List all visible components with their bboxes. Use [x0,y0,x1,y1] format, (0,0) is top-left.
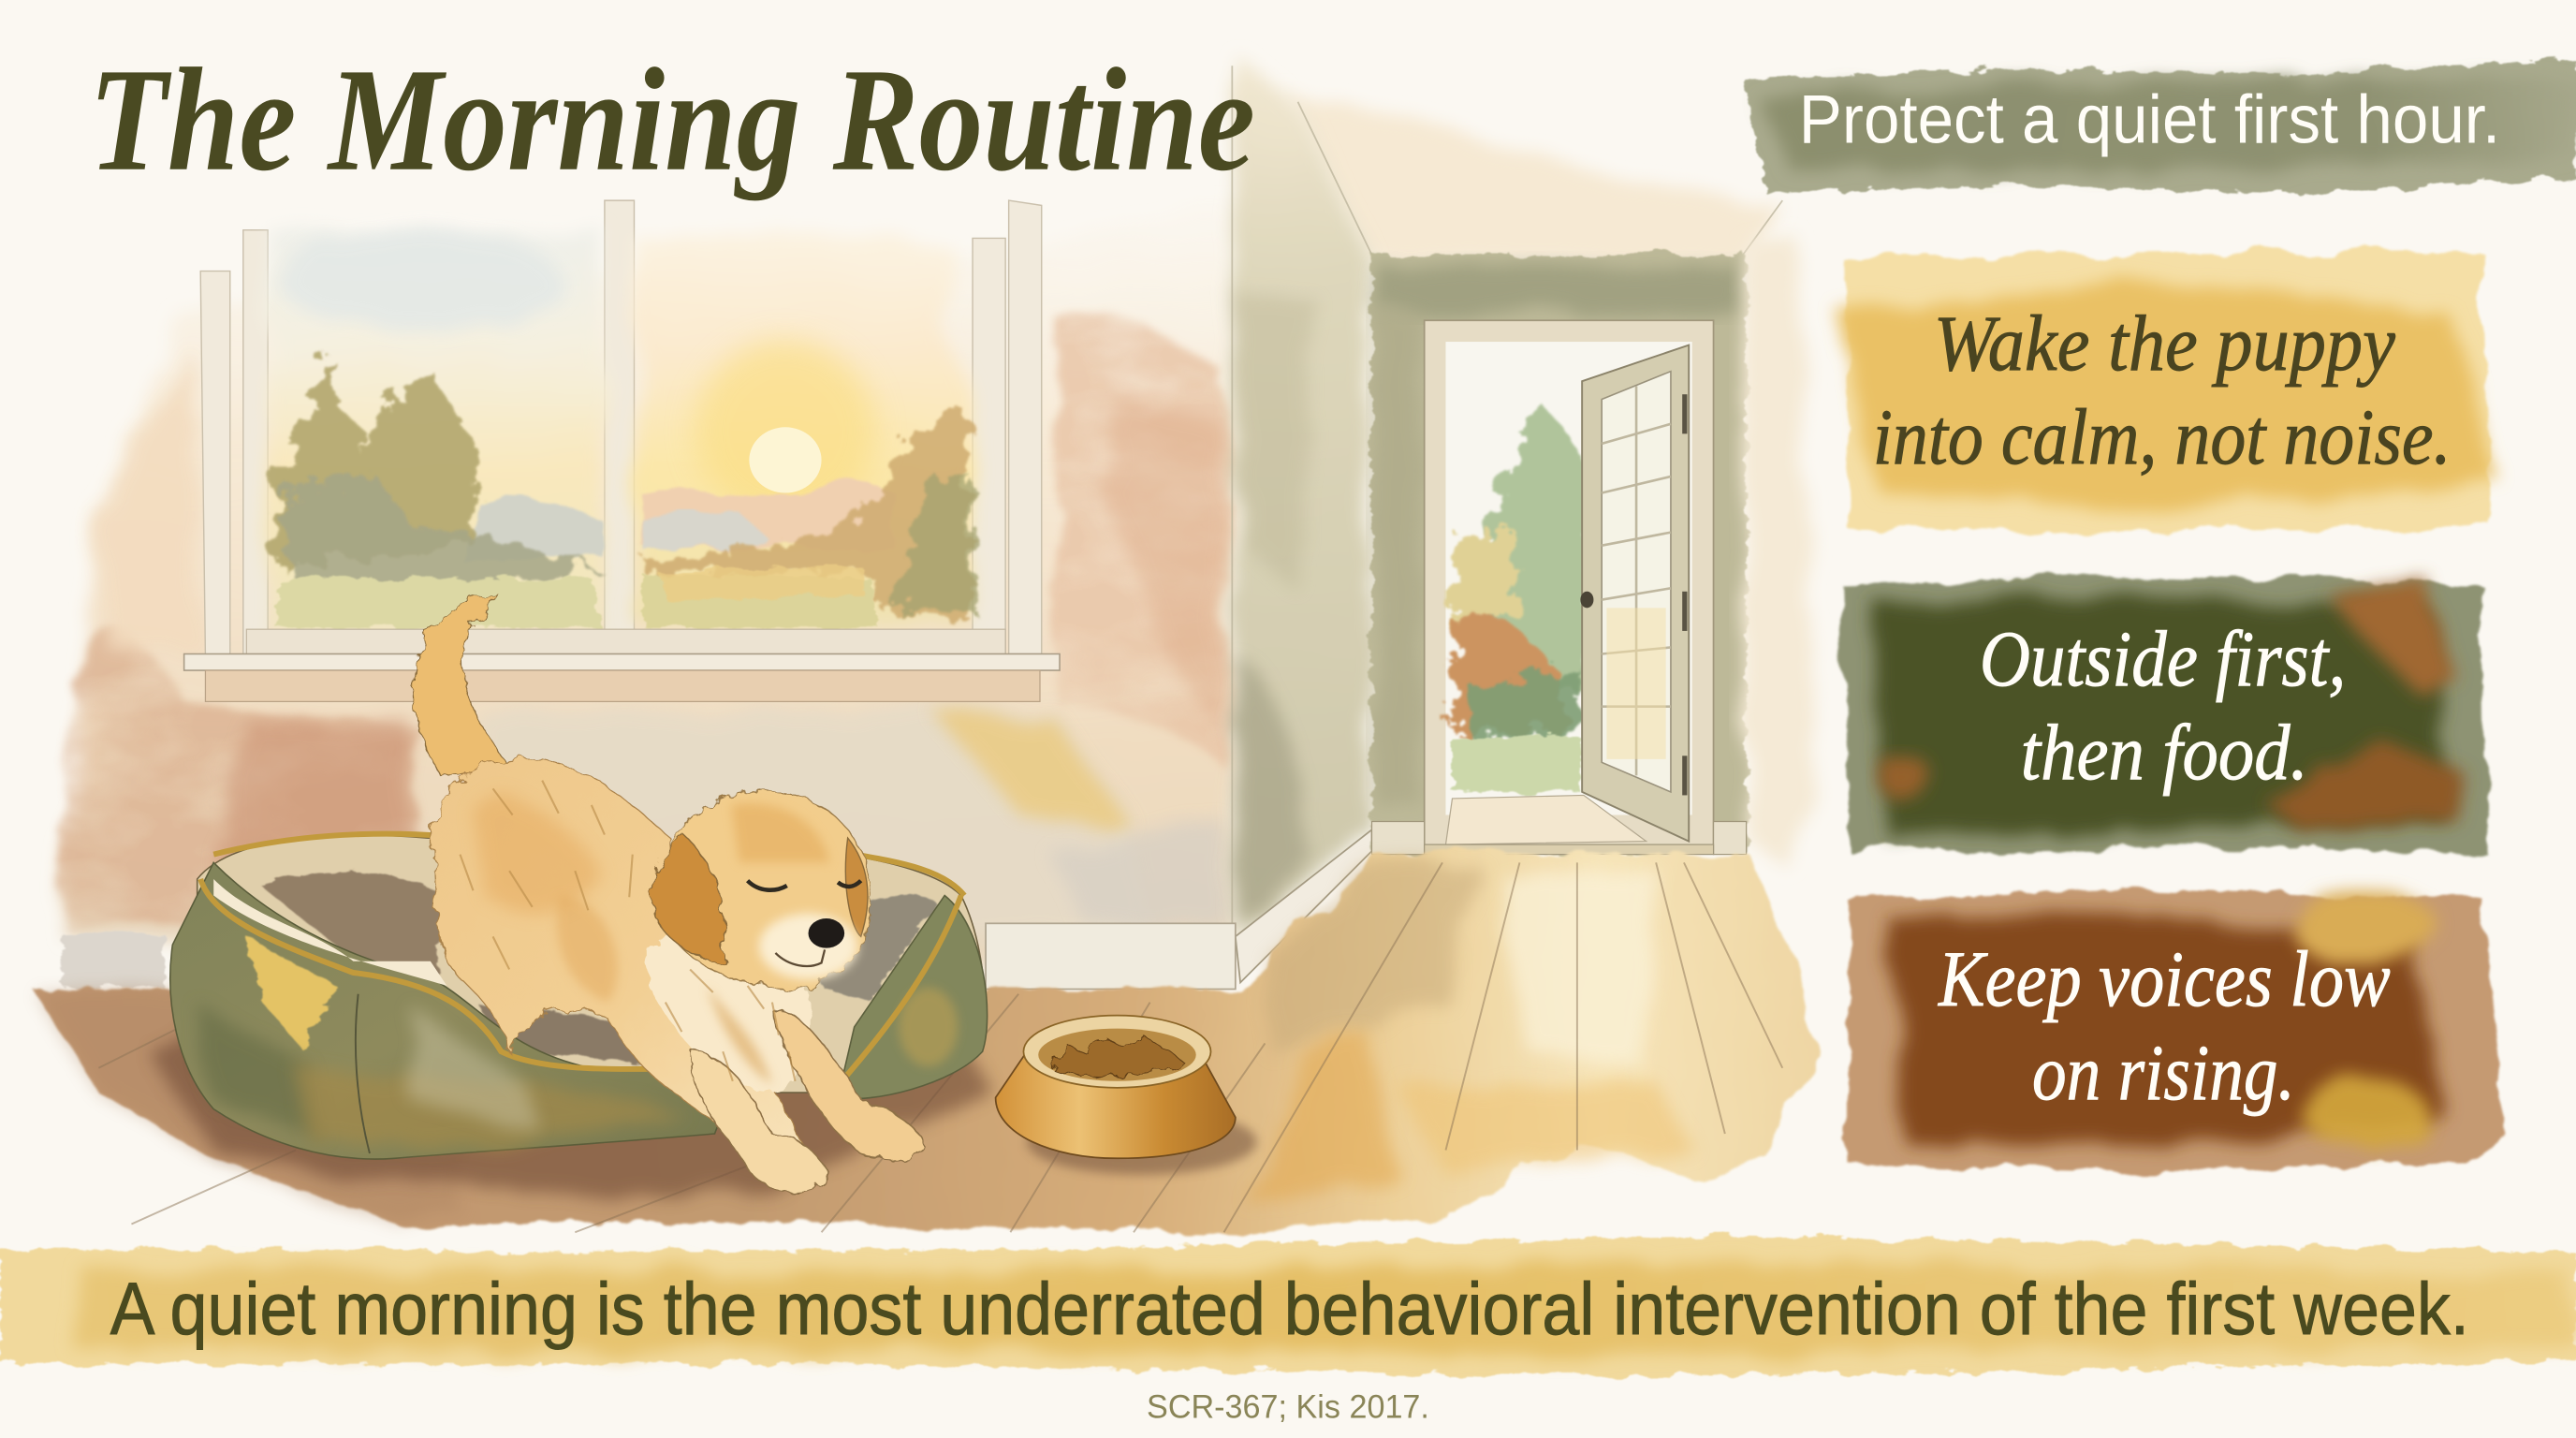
bed front wall [170,862,739,1159]
ears [651,835,724,961]
card: wake the puppy [1837,250,2505,534]
door wall and doorway [1372,238,1815,871]
card text: Wake the puppy [1934,301,2395,388]
body [432,758,813,1170]
title: The Morning Routine [89,38,1255,202]
nose [809,918,844,948]
muzzle [759,914,857,979]
panel: protect a quiet first hour [1745,59,2576,194]
card text: Keep voices low [1938,936,2391,1023]
card text: Outside first, [1980,616,2346,703]
floorboards [98,862,1782,1232]
door knob [1580,592,1593,608]
head [657,792,871,990]
yellow patches [2291,892,2439,1151]
window sill [184,629,1060,701]
window frame [200,200,1042,657]
banner text: Protect a quiet first hour. [1799,81,2500,158]
front leg left [690,1051,827,1194]
left wall wash [63,198,1232,986]
bottom takeaway band [0,1236,2576,1377]
trees [272,353,480,566]
chest fur [649,936,808,1093]
right window pane with sun [637,230,973,627]
food bowl [996,1016,1236,1158]
side wall [1232,50,1782,983]
mouth [775,949,825,966]
window [184,200,1060,701]
illustration: room scene [33,50,1815,1236]
bed gold rim [200,834,964,1077]
door frame [1425,320,1714,846]
rust patches [1880,583,2465,829]
ceiling wash [1281,91,1791,263]
kibble [1051,1035,1186,1077]
garden view [1453,403,1586,792]
bed right wall [838,895,988,1099]
closed eyes [748,881,861,890]
olive door wall [1372,255,1747,855]
threshold [1445,795,1647,844]
dog bed [170,834,988,1159]
open door leaf [1580,345,1689,842]
baseboard [63,923,1236,990]
front leg right [772,1010,924,1161]
floor [33,855,1815,1236]
floor wash [33,855,1815,1236]
bed shadow [148,986,986,1196]
card text: on rising. [2032,1030,2295,1117]
source citation: SCR-367; Kis 2017. [1147,1389,1429,1426]
bed cream lining [213,879,446,986]
card: keep voices low [1848,890,2505,1170]
tail [414,596,513,775]
bed back and inside [198,835,986,1093]
card text: then food. [2021,710,2308,797]
puppy [414,596,924,1194]
card text: into calm, not noise. [1873,394,2452,481]
bowl shadow [1027,1109,1257,1175]
fur strokes [460,781,795,1081]
card: outside first [1840,575,2484,851]
left window pane [268,227,605,629]
